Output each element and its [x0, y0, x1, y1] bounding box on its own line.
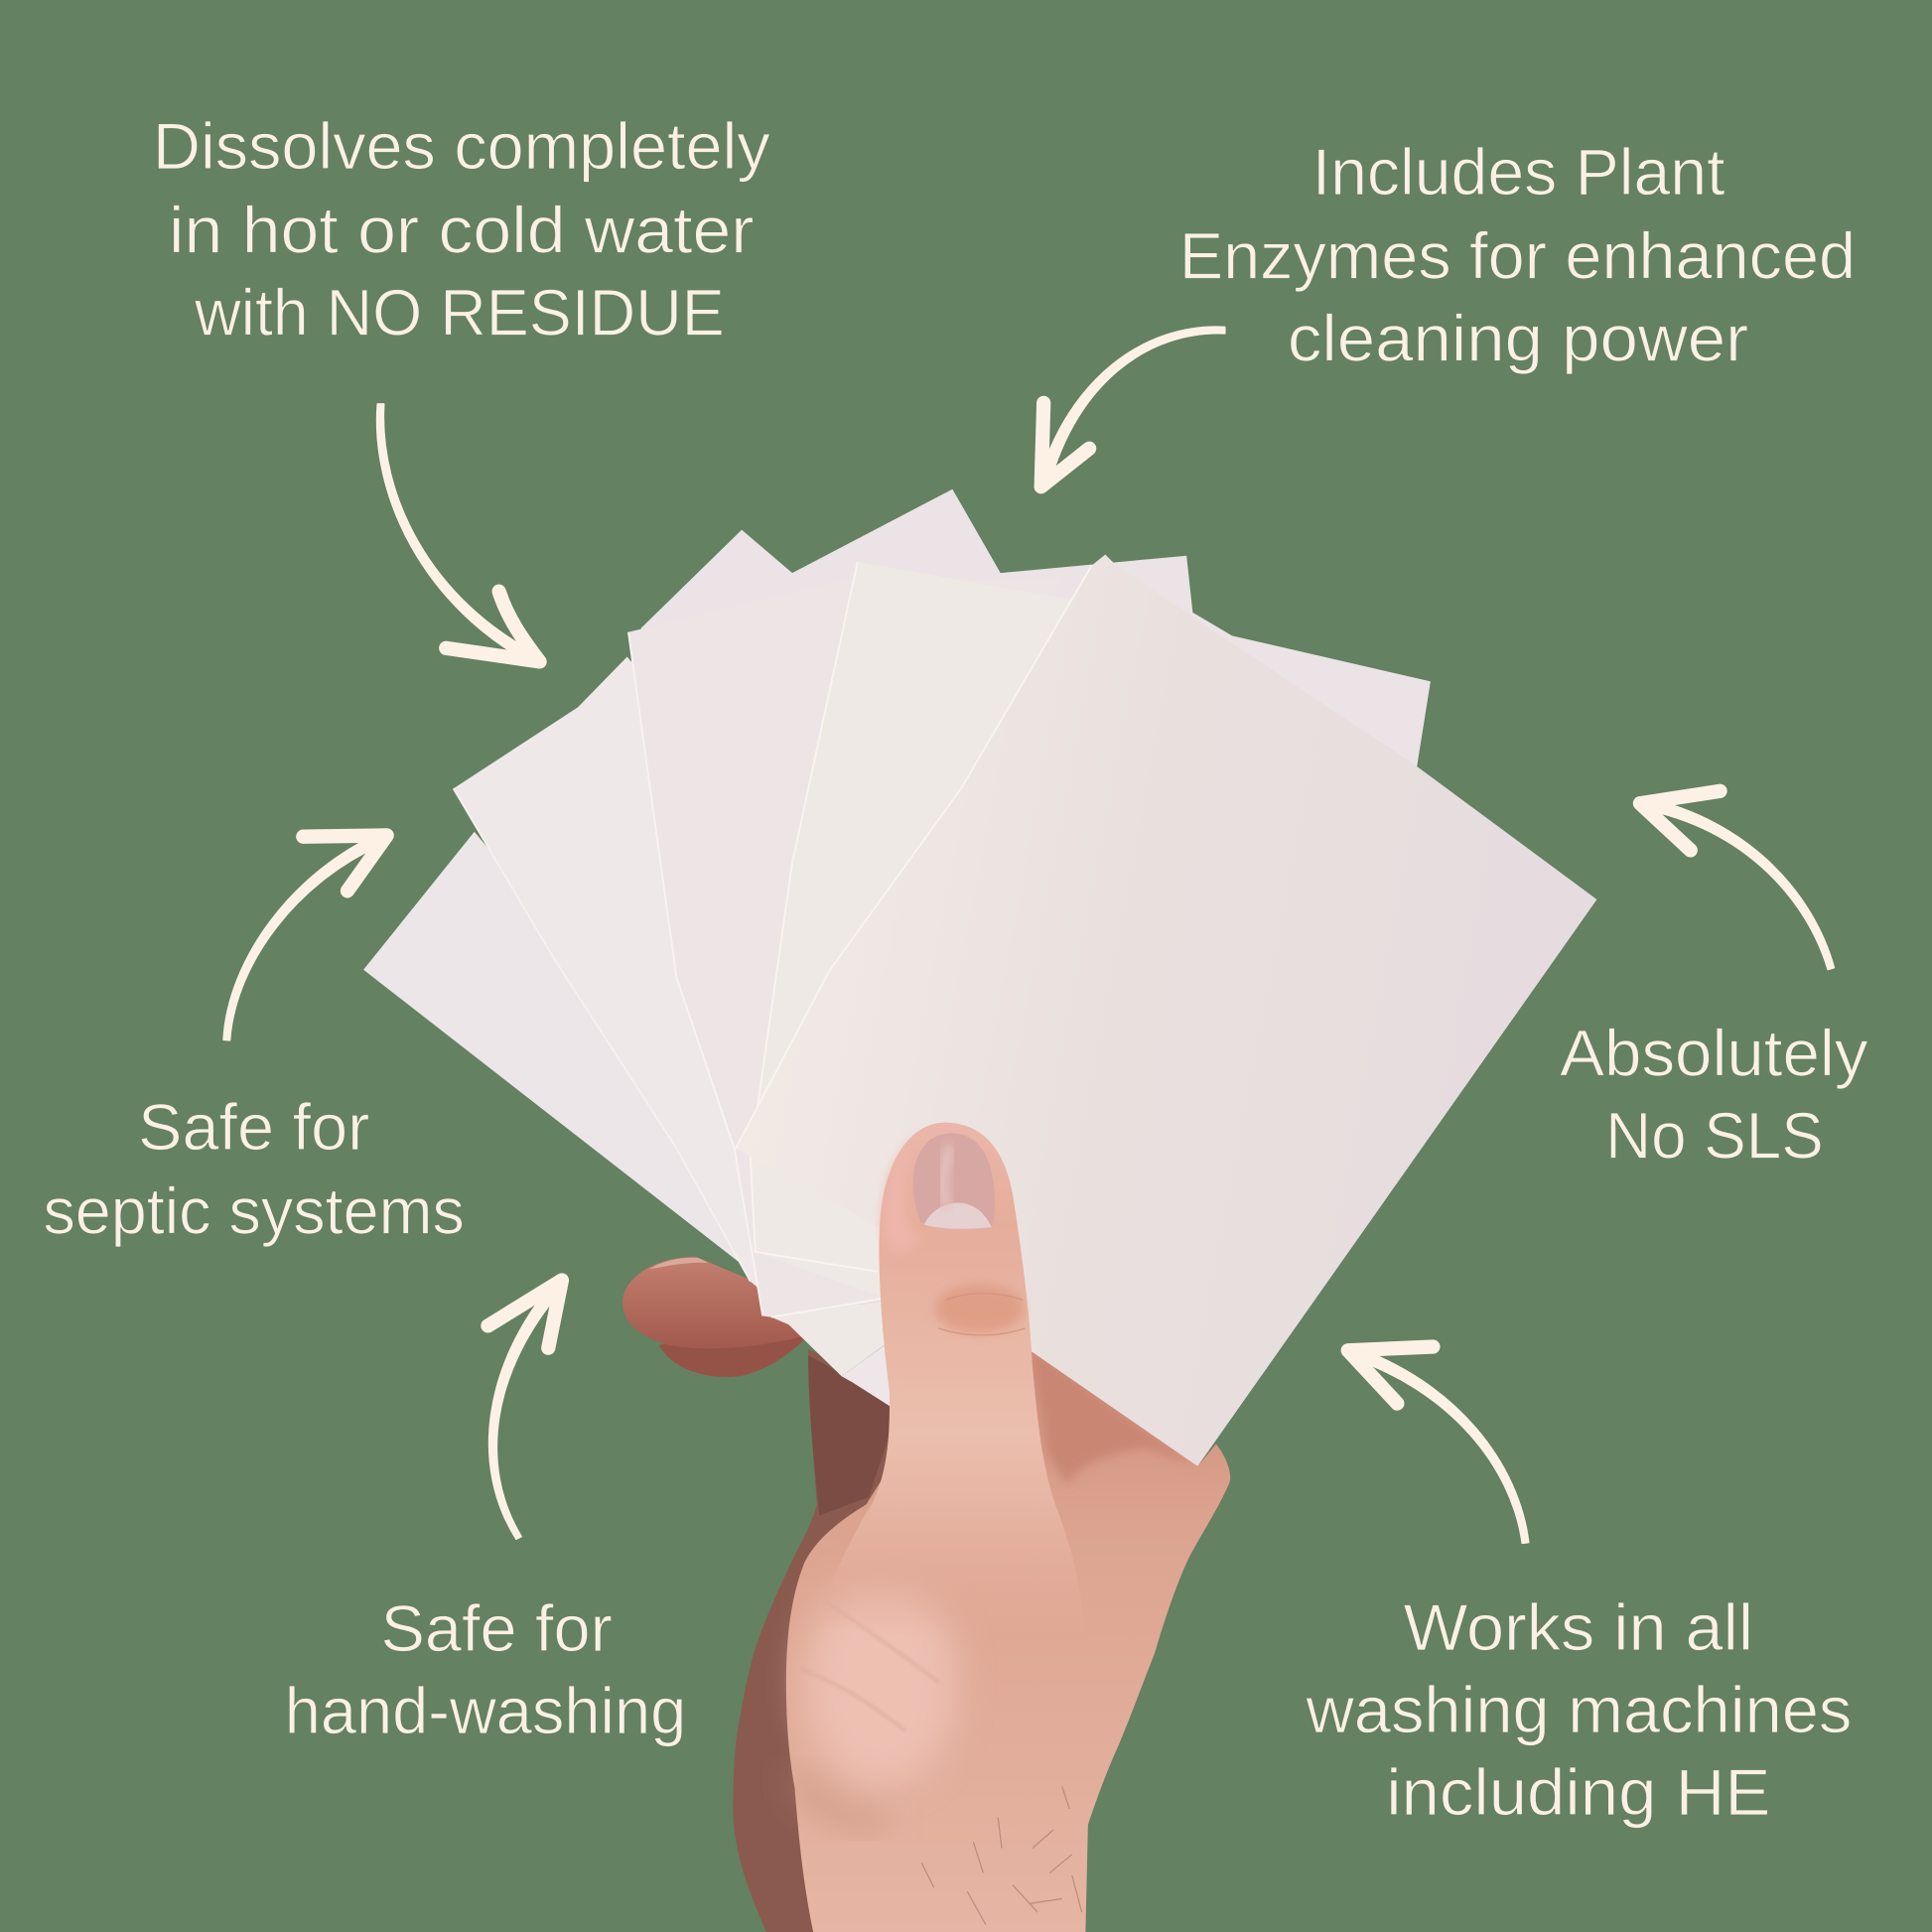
sheet: third [628, 579, 1059, 1317]
arrow: washing machines [1348, 1346, 1529, 1543]
callout: plant enzymes: Includes Plant [1312, 135, 1725, 208]
callout: washing machines [1306, 1590, 1852, 1829]
callout: hand-washing: Safe for [380, 1591, 613, 1665]
callout: plant enzymes: cleaning power [1288, 302, 1748, 375]
sheet: bottom slivers [842, 1340, 897, 1411]
arrow: hand-washing [487, 1280, 564, 1539]
sheet: front [736, 554, 1596, 1466]
sheet: second [454, 656, 863, 1330]
arrow: septic systems [223, 832, 388, 1040]
callout: dissolves completely [153, 109, 770, 349]
hand: back of palm and wrist [733, 1349, 1230, 1932]
callout: dissolves completely: Dissolves completely [153, 109, 770, 183]
callout: washing machines: washing machines [1306, 1673, 1852, 1746]
thumb nail [913, 1133, 995, 1229]
callout: hand-washing [285, 1591, 686, 1747]
callout: hand-washing: hand-washing [285, 1674, 686, 1747]
callout: no SLS: No SLS [1605, 1099, 1824, 1173]
arrow: no SLS [1640, 791, 1834, 969]
sheet: fourth [751, 562, 1109, 1376]
callout: dissolves completely: with NO RESIDUE [194, 276, 725, 349]
photo: hand holding fanned sheets [363, 489, 1596, 1932]
callout: septic systems: Safe for [138, 1090, 369, 1164]
callout: no SLS: Absolutely [1560, 1016, 1868, 1089]
callout: septic systems [43, 1090, 465, 1247]
arrow: plant enzymes [1038, 327, 1225, 486]
hand: wrist hair [921, 1787, 1082, 1925]
sheet: back rows [640, 489, 1431, 863]
callout: septic systems: septic systems [43, 1173, 465, 1247]
sheets [363, 489, 1596, 1466]
callout: plant enzymes [1179, 135, 1856, 375]
callout: no SLS [1560, 1016, 1868, 1173]
callout: plant enzymes: Enzymes for enhanced [1179, 218, 1856, 292]
sheet: far left [363, 832, 788, 1307]
callout: dissolves completely: in hot or cold water [169, 193, 755, 266]
thumb [813, 1123, 1084, 1651]
arrow: dissolves [377, 404, 542, 666]
callout: washing machines: Works in all [1404, 1590, 1753, 1664]
fingers behind the sheets [622, 1257, 826, 1377]
callout: washing machines: including HE [1386, 1755, 1770, 1829]
